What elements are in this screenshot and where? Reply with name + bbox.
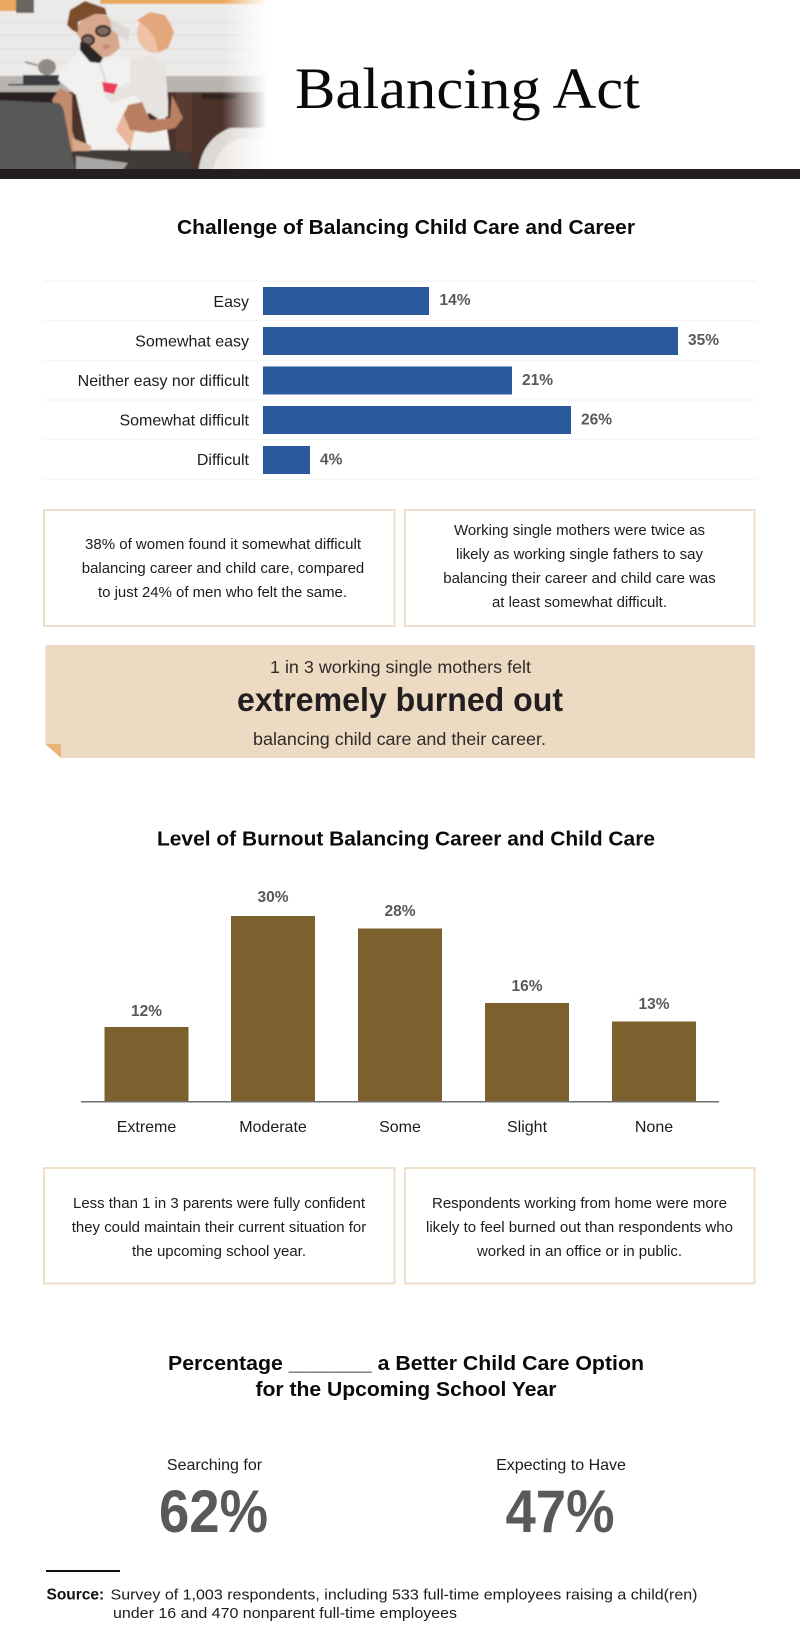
bar: easy: Easy xyxy=(213,294,249,311)
man's shirt xyxy=(57,60,150,152)
callout: working from home xyxy=(405,1168,754,1284)
man's head xyxy=(75,14,120,58)
callout: working from home: likely to feel burned out than respondents who xyxy=(426,1219,733,1236)
baby xyxy=(116,110,136,148)
callout: confidence: they could maintain their current situation for xyxy=(72,1219,366,1236)
column: moderate: 30% xyxy=(257,889,289,906)
heading: challenge of balancing: Challenge of Balancing Child Care and Career xyxy=(177,217,635,239)
stat: expecting to have: 47% xyxy=(506,1478,614,1545)
table xyxy=(74,150,194,169)
heading: level of burnout: Level of Burnout Balancing Career and Child Care xyxy=(157,828,655,850)
column: moderate: Moderate xyxy=(239,1119,307,1136)
title: Balancing Act xyxy=(295,56,640,121)
bar: easy xyxy=(213,287,471,315)
callout: women vs men: balancing career and child care, compared xyxy=(82,560,364,577)
column: none xyxy=(612,996,696,1136)
column: extreme: 12% xyxy=(131,1003,162,1020)
bar: difficult xyxy=(197,446,343,474)
callout: confidence: Less than 1 in 3 parents were fully confident xyxy=(73,1195,366,1212)
callout: single mothers: at least somewhat difficult. xyxy=(492,594,667,611)
column: moderate xyxy=(231,889,315,1136)
bar: neither: Neither easy nor difficult xyxy=(78,373,250,390)
bar: neither: 21% xyxy=(522,372,553,389)
phone xyxy=(80,42,103,63)
bar: difficult: 4% xyxy=(320,452,343,468)
banner: extremely burned out xyxy=(45,645,755,758)
source note: Source: xyxy=(46,1586,104,1604)
column: some: Some xyxy=(379,1119,421,1136)
header photo: father holding baby while on the phone xyxy=(0,0,274,176)
stat: expecting to have: Expecting to Have xyxy=(496,1457,626,1474)
column: some: 28% xyxy=(384,903,416,920)
chair xyxy=(198,126,265,169)
column chart: burnout xyxy=(81,889,719,1136)
source note xyxy=(46,1586,698,1622)
stat: searching for: 62% xyxy=(159,1478,268,1545)
callout: confidence xyxy=(44,1168,394,1284)
bar: somewhat easy: 35% xyxy=(688,332,719,349)
callout: women vs men xyxy=(44,510,394,626)
column: extreme xyxy=(104,1003,188,1136)
column: extreme: Extreme xyxy=(117,1119,176,1136)
callout: confidence: the upcoming school year. xyxy=(132,1243,306,1260)
bar: somewhat difficult: Somewhat difficult xyxy=(119,412,250,430)
callout: single mothers: balancing their career and child care was xyxy=(443,570,716,587)
callout: single mothers: Working single mothers were twice as xyxy=(454,522,705,539)
bar: difficult: Difficult xyxy=(197,452,250,469)
bar: somewhat difficult: 26% xyxy=(581,412,612,428)
heading: percentage better child care option: for the Upcoming School Year xyxy=(256,1379,557,1401)
man's forearm xyxy=(124,95,183,133)
column: slight xyxy=(485,978,569,1136)
stat: searching for: Searching for xyxy=(167,1457,263,1474)
callout: women vs men: to just 24% of men who felt the same. xyxy=(98,584,347,601)
bar: neither xyxy=(78,366,553,394)
banner: extremely burned out: balancing child care and their career. xyxy=(253,729,546,749)
source note: Survey of 1,003 respondents, including 533 full-time employees raising a child(ren) xyxy=(110,1586,698,1604)
callout: single mothers xyxy=(405,510,754,626)
callout: working from home: worked in an office or in public. xyxy=(476,1243,682,1260)
icon: folded corner xyxy=(45,744,61,758)
callout: working from home: Respondents working from home were more xyxy=(432,1195,727,1212)
bar: somewhat easy xyxy=(135,327,719,355)
callout: women vs men: 38% of women found it somewhat difficult xyxy=(85,536,362,553)
bar: somewhat easy: Somewhat easy xyxy=(135,334,249,350)
heading: percentage better child care option xyxy=(168,1353,644,1401)
source note: under 16 and 470 nonparent full-time employees xyxy=(113,1605,457,1622)
column: some xyxy=(358,903,442,1136)
baby's arm xyxy=(110,18,130,42)
banner: extremely burned out: 1 in 3 working single mothers felt xyxy=(270,657,531,677)
banner: extremely burned out: extremely burned out xyxy=(237,681,563,718)
laptop xyxy=(0,100,76,176)
callout: single mothers: likely as working single fathers to say xyxy=(456,546,703,563)
heading: percentage better child care option: Percentage _______ a Better Child Care Option xyxy=(168,1353,644,1375)
man's arm xyxy=(52,88,78,152)
horizontal bar chart: challenge xyxy=(44,281,756,480)
column: slight: 16% xyxy=(511,978,543,995)
bar: somewhat difficult xyxy=(119,406,612,434)
source rule xyxy=(46,1570,120,1572)
bar: easy: 14% xyxy=(440,292,471,309)
column: none: None xyxy=(635,1119,673,1136)
header band xyxy=(0,169,800,179)
column: slight: Slight xyxy=(507,1119,548,1136)
column: none: 13% xyxy=(638,996,670,1013)
